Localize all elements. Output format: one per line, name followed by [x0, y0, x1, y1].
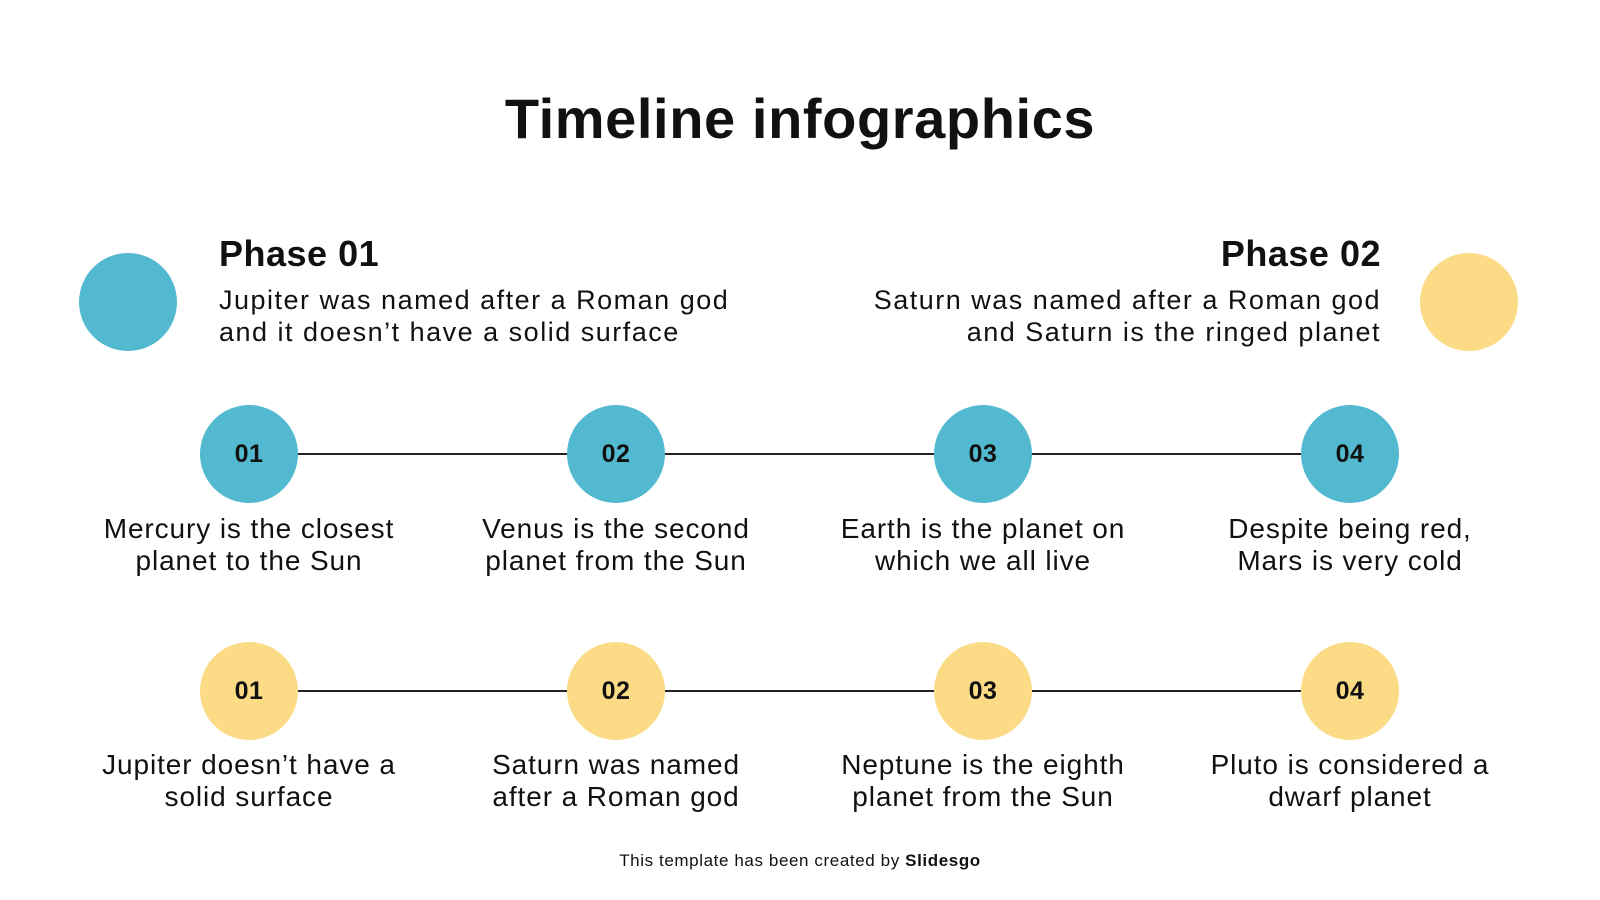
step 04 — [1301, 642, 1399, 740]
label 01 — [102, 749, 396, 812]
phase 02 text — [874, 233, 1381, 347]
phase 01 text — [219, 233, 729, 347]
phase 01 text: and it doesn’t have a solid surface — [219, 317, 680, 347]
step 02 — [567, 642, 665, 740]
step 03 — [934, 405, 1032, 503]
step 04 — [1301, 405, 1399, 503]
label 01: solid surface — [165, 781, 333, 812]
phase 01 text: Jupiter was named after a Roman god — [219, 285, 729, 315]
label 02: after a Roman god — [492, 781, 740, 812]
label 03: planet from the Sun — [852, 781, 1114, 812]
label 02: Saturn was named — [492, 749, 740, 780]
label 02: planet from the Sun — [485, 545, 747, 576]
phase 02 text: Phase 02 — [1221, 233, 1381, 274]
label 01: Jupiter doesn’t have a — [102, 749, 396, 780]
label 01: planet to the Sun — [135, 545, 363, 576]
label 04: dwarf planet — [1268, 781, 1432, 812]
label 04: Despite being red, — [1228, 513, 1472, 544]
label 01: Mercury is the closest — [104, 513, 394, 544]
step 02 — [567, 405, 665, 503]
step 04: 04 — [1336, 676, 1364, 704]
label 04: Mars is very cold — [1237, 545, 1463, 576]
phase 02 text: and Saturn is the ringed planet — [967, 317, 1381, 347]
label 04: Pluto is considered a — [1211, 749, 1489, 780]
label 02 — [482, 513, 750, 576]
step 01: 01 — [235, 440, 263, 468]
label 03: which we all live — [875, 545, 1091, 576]
label 02: Venus is the second — [482, 513, 750, 544]
step 01: 01 — [235, 676, 263, 704]
step 02: 02 — [602, 676, 630, 704]
label 04 — [1211, 749, 1489, 812]
timeline row 2 — [102, 642, 1489, 812]
label 03: Neptune is the eighth — [841, 749, 1125, 780]
step 01 — [200, 642, 298, 740]
step 03: 03 — [969, 676, 997, 704]
label 03 — [841, 749, 1125, 812]
step 01 — [200, 405, 298, 503]
icon: phase 01 circle — [79, 253, 177, 351]
step 04: 04 — [1336, 440, 1364, 468]
icon: phase 02 circle — [1420, 253, 1518, 351]
phase 01 text: Phase 01 — [219, 233, 379, 274]
label 01 — [104, 513, 394, 576]
label 04 — [1228, 513, 1472, 576]
phase 02 text: Saturn was named after a Roman god — [874, 285, 1381, 315]
step 03 — [934, 642, 1032, 740]
label 03 — [841, 513, 1125, 576]
timeline row 1 — [104, 405, 1472, 576]
title: Timeline infographics — [505, 87, 1095, 150]
step 03: 03 — [969, 440, 997, 468]
step 02: 02 — [602, 440, 630, 468]
label 03: Earth is the planet on — [841, 513, 1125, 544]
footer: This template has been created by Slidesgo — [619, 851, 981, 870]
label 02 — [492, 749, 740, 812]
